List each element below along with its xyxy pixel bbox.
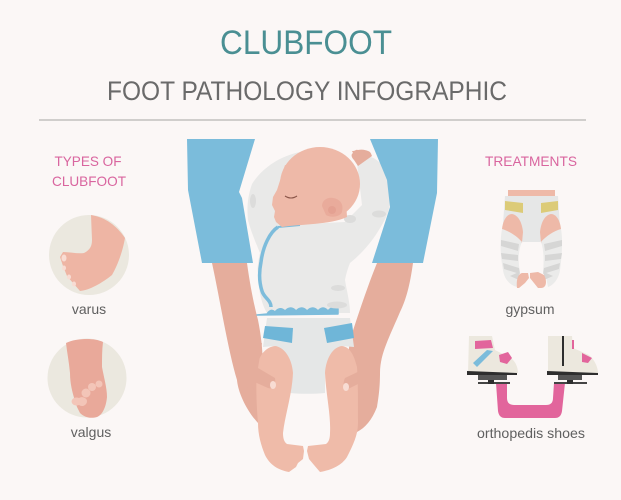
onesie trim [260,227,278,307]
diaper tabs [263,326,293,343]
right forearm [345,263,413,432]
left fingers [237,343,275,396]
left sleeve [187,139,255,263]
brace bar [496,383,565,418]
diaper [263,318,354,394]
right fingers [344,355,380,400]
title: CLUBFOOT [220,24,392,62]
subtitle: FOOT PATHOLOGY INFOGRAPHIC [107,76,507,106]
label: valgus: valgus [71,424,111,440]
right shoe [548,336,598,373]
left forearm [212,263,263,423]
baby hand right [352,150,372,166]
heading: types of clubfoot [52,153,126,189]
head [272,147,360,227]
diaper tab right [324,323,354,343]
right leg and foot [307,346,358,472]
label: gypsum: gypsum [505,301,555,317]
onesie [247,152,390,313]
heading: treatments: TREATMENTS [485,153,577,169]
label: varus: varus [72,301,106,317]
icon: varus foot [49,215,129,295]
eye [285,196,297,198]
heading: types of clubfoot: CLUBFOOT [52,173,126,189]
label: orthopedic shoes: orthopedis shoes [477,425,585,441]
icon: gypsum [501,190,562,288]
left shoe [468,336,518,373]
right sleeve [370,139,438,263]
icon: orthopedic shoes [467,336,598,418]
ear [322,198,343,217]
icon: valgus foot [48,338,126,418]
illustration: baby held by hands [187,139,438,472]
heading: types of clubfoot: TYPES OF [54,153,122,169]
left leg and foot [256,346,304,472]
